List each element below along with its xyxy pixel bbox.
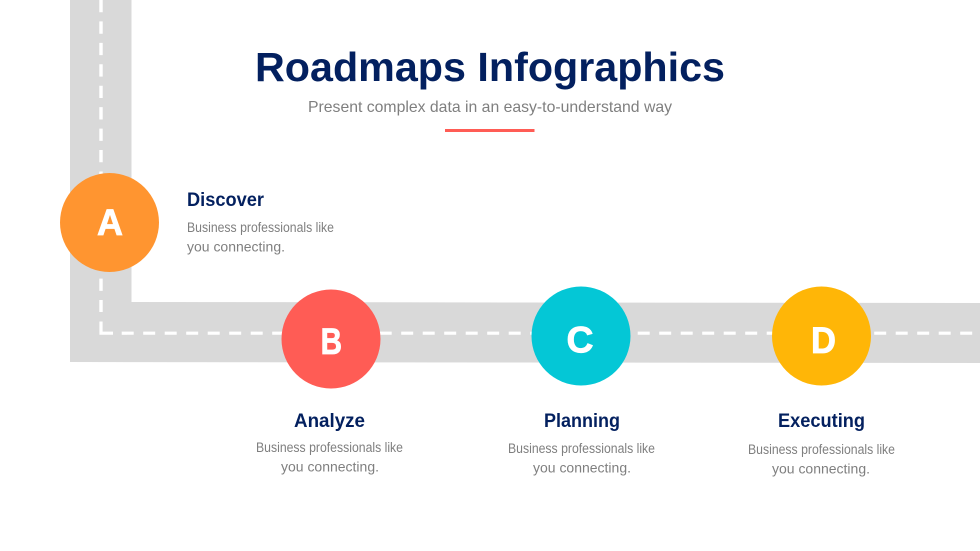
description D: you connecting. (772, 462, 870, 476)
heading Analyze: Analyze (294, 411, 365, 432)
description B: Business professionals like (256, 440, 403, 455)
heading Executing: Executing (778, 411, 865, 432)
marker C: C (566, 320, 594, 360)
marker D (772, 286, 871, 386)
step A: Discover (60, 173, 334, 272)
marker B: B (321, 321, 342, 362)
marker C (532, 286, 630, 386)
heading Discover: Discover (187, 190, 265, 211)
subtitle: Present complex data in an easy-to-understand way (308, 99, 672, 116)
step D: Executing (748, 286, 895, 476)
title underline (445, 129, 534, 132)
marker A: A (97, 202, 123, 243)
description C: you connecting. (533, 460, 631, 476)
step C: Planning (508, 286, 655, 476)
title: Roadmaps Infographics (255, 44, 725, 90)
description A: Business professionals like (187, 220, 334, 235)
marker A (60, 173, 159, 272)
description B: you connecting. (281, 460, 379, 474)
description C: Business professionals like (508, 441, 655, 456)
road (70, 0, 980, 363)
description D: Business professionals like (748, 442, 895, 457)
marker D: D (811, 320, 836, 361)
step B: Analyze (256, 290, 403, 474)
description A: you connecting. (187, 240, 285, 254)
heading Planning: Planning (544, 411, 620, 432)
marker B (282, 290, 380, 388)
